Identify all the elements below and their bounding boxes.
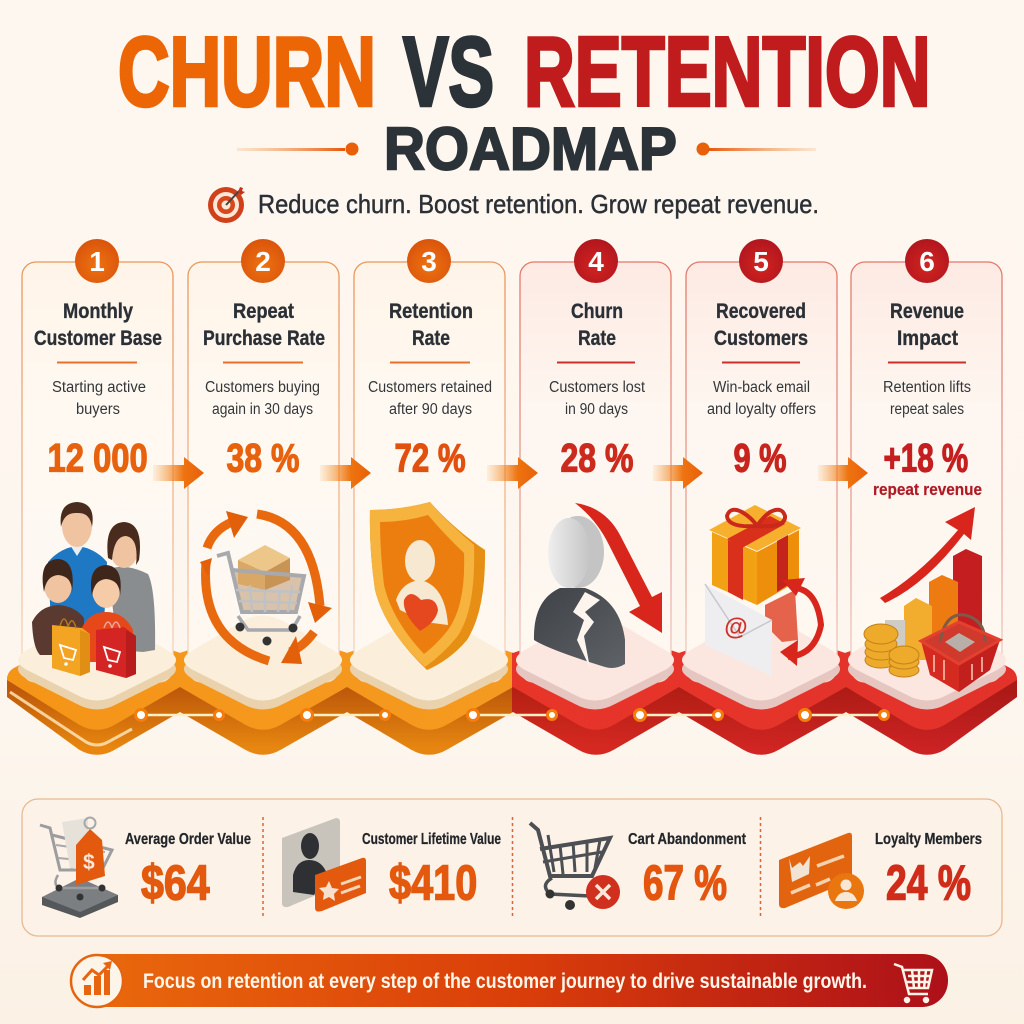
heading: [571, 300, 623, 350]
title: [118, 17, 931, 127]
front right person: [81, 565, 133, 662]
icon: lost customer with falling arrow: [534, 503, 662, 668]
description: Customers lost: [549, 379, 646, 396]
icon: customer profile card: [282, 818, 366, 912]
description: [368, 379, 492, 418]
icon: loyalty card: [779, 833, 864, 909]
value: 12 000: [48, 435, 148, 480]
step number 1: 1: [89, 246, 105, 277]
shopping cart: [217, 545, 304, 646]
red shopping bag: [96, 622, 136, 678]
heading: Customer Base: [34, 327, 162, 350]
step number 6: [905, 239, 949, 283]
customer silhouette: [396, 540, 448, 625]
arrow 4: [653, 457, 703, 489]
description: after 90 days: [389, 401, 472, 418]
description: [707, 379, 816, 418]
description: Customers retained: [368, 379, 492, 396]
description: again in 30 days: [212, 401, 313, 418]
description: [52, 379, 146, 418]
label: Average Order Value: [125, 831, 251, 848]
step number 1: [75, 239, 119, 283]
value: 28 %: [560, 435, 633, 480]
falling arrow: [575, 503, 662, 633]
description: Win-back email: [713, 379, 810, 396]
arrow 5: [818, 457, 868, 489]
person head: [548, 516, 604, 588]
value: 24 %: [886, 857, 971, 911]
platform plates: [18, 616, 1006, 710]
step number 2: [241, 239, 285, 283]
label: Cart Abandonment: [628, 831, 747, 848]
value: 38 %: [226, 435, 299, 480]
arrow 3: [487, 457, 538, 489]
heading: Retention: [389, 300, 473, 323]
icon: cart with price tag: $: [83, 851, 95, 874]
gift box: [709, 505, 801, 605]
bow: [727, 510, 785, 526]
heading: Purchase Rate: [203, 327, 325, 350]
title: RETENTION: [524, 18, 931, 127]
step number 3: 3: [421, 246, 437, 277]
subtitle: roadmap: [237, 116, 816, 183]
return arrow: [780, 578, 821, 666]
heading: Revenue: [890, 300, 964, 323]
envelope: @: [724, 614, 748, 641]
step number 5: [739, 239, 783, 283]
label: Loyalty Members: [875, 831, 982, 848]
description: [883, 379, 971, 418]
icon: growth chart badge: [71, 955, 123, 1007]
icon: gift, email and return arrow: [705, 505, 821, 676]
front left girl: [32, 559, 84, 655]
value: 9 %: [734, 436, 787, 480]
step number 6: 6: [919, 246, 935, 277]
value: $64: [141, 855, 210, 910]
heading: Churn: [571, 300, 623, 323]
panel: stats: [22, 799, 1002, 936]
value: +18 %: [884, 436, 968, 481]
panel: step 1 monthly customer base: [22, 239, 173, 682]
heading: [203, 300, 325, 350]
label: Customer Lifetime Value: [362, 831, 501, 848]
description: [549, 379, 646, 418]
step number 5: 5: [753, 246, 769, 277]
value caption: repeat revenue: [873, 480, 982, 499]
person body: [534, 588, 625, 668]
value: 67 %: [643, 857, 727, 911]
icon: customer group: [32, 502, 155, 678]
small parcel: [765, 590, 798, 642]
description: [205, 379, 320, 418]
heading: Customers: [714, 327, 808, 350]
heading: [389, 300, 473, 350]
icon: shield with customer: [370, 502, 485, 670]
description: in 90 days: [565, 401, 628, 418]
subtitle: roadmap: ROADMAP: [384, 116, 677, 183]
heading: Rate: [412, 327, 450, 350]
heading: Rate: [578, 327, 616, 350]
icon: cart with repeat arrows: [200, 511, 332, 664]
platform base: [7, 625, 1017, 755]
panel: step 5 recovered customers: [686, 239, 837, 682]
heading: Repeat: [233, 300, 294, 323]
heading: [714, 300, 808, 350]
arrow 2: [320, 457, 371, 489]
yellow shopping bag: [52, 619, 90, 676]
heading: [890, 300, 964, 350]
heading: Recovered: [716, 300, 806, 323]
back woman: [107, 522, 155, 652]
value: $410: [389, 857, 477, 910]
icon: cart with price tag: [40, 818, 118, 918]
bars: [885, 549, 982, 660]
description: repeat sales: [890, 401, 964, 418]
value: 72 %: [394, 436, 466, 480]
description: Retention lifts: [883, 379, 971, 396]
title: CHURN: [118, 18, 376, 127]
panel: step 3 retention rate: [354, 239, 505, 682]
heading: Monthly: [63, 300, 133, 323]
description: and loyalty offers: [707, 401, 816, 418]
coins: [864, 624, 919, 677]
description: Customers buying: [205, 379, 320, 396]
banner: [71, 954, 948, 1007]
step number 3: [407, 239, 451, 283]
heart: [404, 594, 438, 631]
icon: target: [208, 187, 245, 223]
icon: revenue growth: [864, 507, 1000, 692]
envelope: [705, 584, 772, 676]
panel: step 4 churn rate: [520, 239, 671, 682]
step number 4: 4: [588, 246, 604, 277]
heading: [34, 300, 162, 350]
tagline: Reduce churn. Boost retention. Grow repeat revenue.: [258, 189, 819, 219]
panel: step 2 repeat purchase rate: [188, 239, 339, 682]
title: VS: [403, 17, 494, 126]
connectors: glowing links: [136, 710, 888, 720]
heading: Impact: [897, 327, 958, 350]
description: Starting active: [52, 379, 146, 396]
repeat arrows: [206, 514, 320, 661]
red basket: [921, 615, 1000, 692]
icon: abandoned cart: [530, 823, 620, 910]
growth arrow: [880, 507, 975, 603]
arrow 1: [153, 457, 204, 489]
panel: step 6 revenue impact: [851, 239, 1002, 682]
crack: [573, 592, 600, 668]
back man: [48, 502, 107, 645]
step number 4: [574, 239, 618, 283]
description: buyers: [76, 401, 120, 418]
step number 2: 2: [255, 246, 271, 277]
icon: cart: [894, 964, 932, 1002]
banner message: Focus on retention at every step of the customer journey to drive sustainable growth.: [143, 970, 867, 993]
